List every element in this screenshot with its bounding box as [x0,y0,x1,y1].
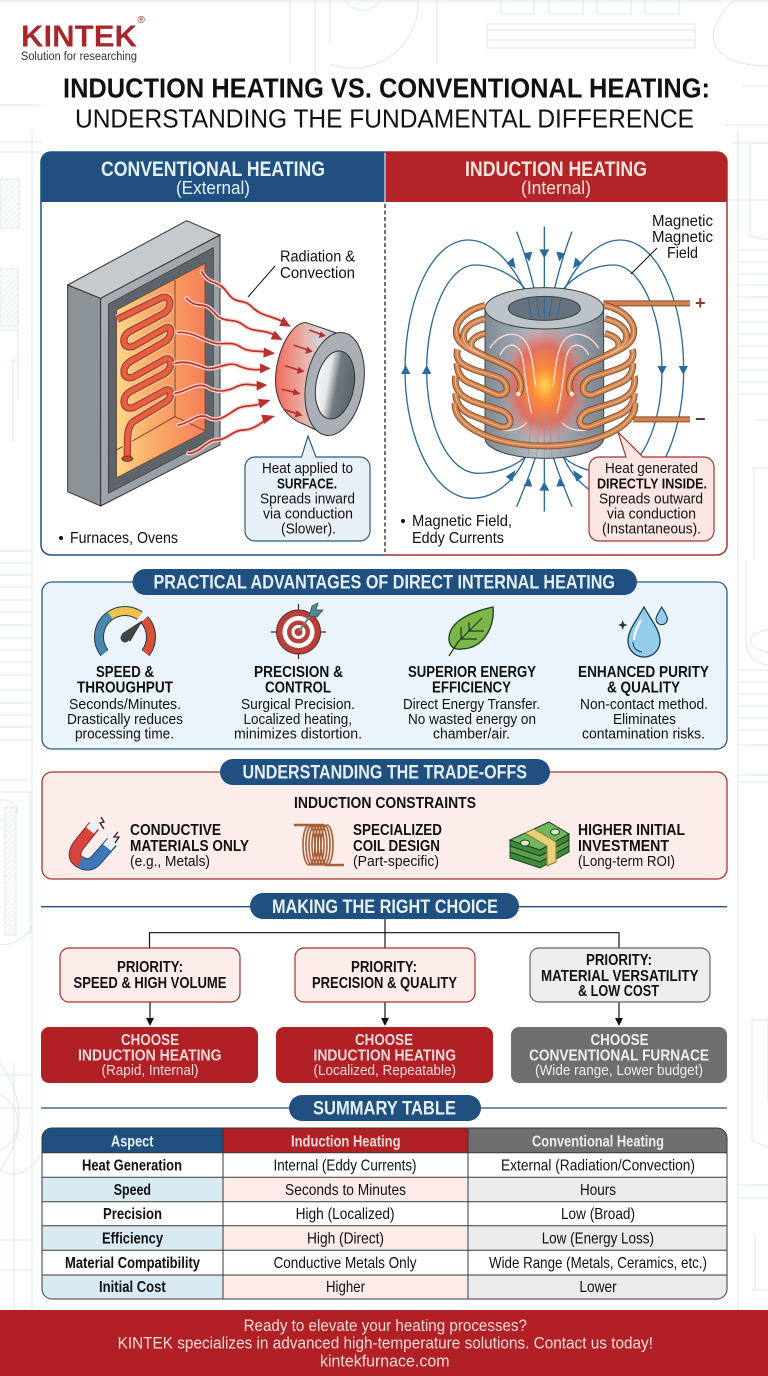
arrowheads [146,1018,623,1026]
header: conventional heating [41,152,384,202]
row: heat generation: Internal (Eddy Currents) [274,1158,416,1174]
text: superior energy efficiency: EFFICIENCY [432,680,511,696]
text: conductive materials only: (e.g., Metals) [130,853,210,870]
text: superior energy efficiency: SUPERIOR ENERGY [408,664,536,681]
text: conductive materials only [130,822,249,870]
row: material compatibility: Material Compatibility [65,1255,200,1272]
text: superior energy efficiency: No wasted energy on [408,711,536,728]
section: making the right choice [41,893,727,1083]
callout: internal heat: (Instantaneous). [602,520,701,538]
row: initial cost [99,1279,617,1296]
copper leads [603,303,690,419]
text: speed and throughput: SPEED & [96,664,154,681]
icon: target [271,603,326,659]
logo: Solution for researching [21,51,137,63]
row: heat generation: External (Radiation/Convection) [501,1158,695,1174]
row: efficiency [102,1230,654,1248]
text: speed and throughput: processing time. [75,726,174,742]
section: summary table [41,1095,727,1299]
row: speed [114,1182,616,1199]
footer banner: KINTEK specializes in advanced high-temperature solutions. Contact us today! [118,1334,653,1352]
result: conventional furnace: (Wide range, Lower budget) [535,1062,703,1079]
callout: surface heat: Heat applied to [262,460,353,477]
callout: internal heat: DIRECTLY INSIDE. [597,476,707,492]
label: radiation and convection: Convection [280,265,355,282]
text: enhanced purity and quality: contamination risks. [582,726,705,742]
text: precision and control: minimizes distortion. [234,726,362,742]
text: higher initial investment: HIGHER INITIAL [578,822,685,839]
result: induction rapid: CHOOSE [121,1032,179,1049]
logo: KINTEK [21,18,138,54]
result: induction rapid [41,1027,258,1083]
priority: precision and quality: PRIORITY: [351,959,417,976]
panel: practical advantages [42,569,727,749]
callout: internal heat: Heat generated [605,460,698,477]
subheading: induction constraints: INDUCTION CONSTRAINTS [294,795,476,812]
text: speed and throughput [67,664,183,742]
result: induction localized [276,1027,493,1083]
polarity: plus and minus [695,293,706,429]
row: material compatibility: Wide Range (Metals, Ceramics, etc.) [489,1255,707,1272]
callout: surface heat: via conduction [263,506,353,522]
polarity: plus and minus: − [695,409,706,429]
panel: trade-offs [42,759,727,879]
text: specialized coil design: (Part-specific) [353,853,439,870]
row: precision: High (Localized) [296,1206,395,1223]
row: speed: Speed [114,1182,151,1199]
text: precision and control: Localized heating, [244,711,352,728]
row: efficiency: High (Direct) [307,1230,384,1248]
priority: speed and high volume: SPEED & HIGH VOLUME [74,975,227,992]
heading: trade-offs: UNDERSTANDING THE TRADE-OFFS [242,762,527,784]
polarity: plus and minus: + [695,293,706,313]
logo [21,15,146,63]
row: initial cost: Initial Cost [99,1279,166,1296]
result: induction localized: CHOOSE [355,1032,413,1049]
result: conventional furnace: CONVENTIONAL FURNACE [529,1048,709,1064]
icon: copper coil [294,825,344,865]
field arrowheads [401,249,688,491]
footer banner: Ready to elevate your heating processes? [244,1316,527,1335]
header: induction heating [386,152,727,202]
priority: material versatility and low cost: PRIORITY: [586,952,652,969]
row: initial cost: Higher [326,1279,366,1296]
label: magnetic field: Field [667,245,698,262]
header: induction heating: (Internal) [521,178,591,198]
row: precision: Precision [103,1206,162,1223]
cylinder [485,308,604,458]
callout: surface heat: SURFACE. [277,476,337,492]
header: induction heating: INDUCTION HEATING [465,158,647,181]
text: specialized coil design: SPECIALIZED [353,822,442,839]
table header row: Induction Heating [291,1134,400,1150]
callout: internal heat: via conduction [607,506,696,522]
label: furnaces, ovens: Furnaces, Ovens [70,530,178,547]
label: magnetic field [631,213,713,274]
header: conventional heating: (External) [176,178,250,198]
row: precision: Low (Broad) [561,1206,635,1223]
label: radiation and convection [248,248,355,297]
text: superior energy efficiency: Direct Energy Transfer. [403,696,540,713]
text: precision and control [234,664,362,742]
text: superior energy efficiency: chamber/air. [433,726,510,742]
result: induction localized: (Localized, Repeatable) [314,1062,456,1079]
row: material compatibility [65,1255,707,1272]
label: magnetic field, eddy currents [401,513,512,547]
heading: summary table: SUMMARY TABLE [313,1098,456,1120]
text: precision and control: Surgical Precision. [241,696,355,713]
eddy currents [490,334,599,430]
table header row [111,1134,664,1150]
priority: precision and quality [295,948,475,1002]
table header row: Conventional Heating [532,1134,664,1150]
result: induction rapid: (Rapid, Internal) [102,1062,198,1079]
label: magnetic field: Magnetic [652,213,713,230]
icon: speedometer [99,611,151,653]
text: conductive materials only: MATERIALS ONLY [130,838,249,855]
text: enhanced purity and quality: Non-contact method. [580,696,708,713]
row: efficiency: Low (Energy Loss) [542,1230,654,1248]
callout: internal heat: Spreads outward [599,490,703,508]
priority: speed and high volume [60,948,240,1002]
callout: internal heat [589,432,714,541]
text: superior energy efficiency [403,664,540,742]
illustration: furnace [68,221,372,506]
title [63,72,710,134]
label: magnetic field, eddy currents: Magnetic Field, [412,513,512,530]
row: heat generation: Heat Generation [82,1158,182,1174]
priority: material versatility and low cost: MATERIAL VERSATILITY [541,968,699,985]
priority: material versatility and low cost: & LOW COST [578,983,659,1000]
row: speed: Seconds to Minutes [285,1182,406,1199]
heading: making the right choice: MAKING THE RIGHT CHOICE [272,896,498,918]
heading: practical advantages: PRACTICAL ADVANTAGES OF DIRECT INTERNAL HEATING [154,572,615,594]
header: conventional heating: CONVENTIONAL HEATING [101,158,325,181]
text: precision and control: PRECISION & [254,664,343,681]
footer banner [0,1310,768,1376]
label: radiation and convection: Radiation & [280,248,355,266]
title: UNDERSTANDING THE FUNDAMENTAL DIFFERENCE [75,104,694,134]
icon: water drops [618,607,667,657]
icon: metal ring [276,323,372,440]
icon: leaf [449,607,493,656]
text: specialized coil design [353,822,442,870]
title: INDUCTION HEATING VS. CONVENTIONAL HEATING: [63,72,710,104]
row: precision [103,1206,635,1223]
row: material compatibility: Conductive Metals Only [274,1255,416,1272]
priority: precision and quality: PRECISION & QUALITY [312,975,457,992]
text: speed and throughput: THROUGHPUT [77,680,173,696]
result: induction rapid: INDUCTION HEATING [78,1048,222,1064]
panel: comparison [41,152,727,555]
text: speed and throughput: Drastically reduces [67,711,183,728]
table header row: Aspect [111,1134,154,1150]
row: efficiency: Efficiency [102,1230,163,1248]
label: magnetic field, eddy currents: Eddy Currents [412,530,504,547]
text: enhanced purity and quality [578,664,709,742]
footer banner: kintekfurnace.com [320,1352,450,1370]
icon: money stack [510,822,569,868]
text: higher initial investment: INVESTMENT [578,838,669,855]
text: higher initial investment [578,822,685,870]
row: speed: Hours [580,1182,616,1199]
result: induction localized: INDUCTION HEATING [314,1048,456,1064]
callout: surface heat: Spreads inward [260,490,355,508]
result: conventional furnace [511,1027,727,1083]
result: conventional furnace: CHOOSE [590,1032,649,1049]
icon: heat waves [175,272,291,453]
text: enhanced purity and quality: Eliminates [613,711,676,728]
copper coil [455,305,635,446]
icon: horseshoe magnet [75,817,119,864]
row: heat generation [82,1158,695,1174]
row: initial cost: Lower [579,1279,617,1296]
text: enhanced purity and quality: ENHANCED PURITY [578,664,709,681]
logo: ® [138,15,146,26]
text: conductive materials only: CONDUCTIVE [130,822,221,839]
priority: material versatility and low cost [530,948,710,1002]
callout: surface heat [245,436,370,541]
text: precision and control: CONTROL [265,680,331,696]
label: magnetic field: Magnetic [652,229,713,246]
magnetic field lines [405,227,684,512]
decision connectors [150,919,619,1020]
priority: speed and high volume: PRIORITY: [117,959,183,976]
text: enhanced purity and quality: & QUALITY [607,680,680,696]
text: speed and throughput: Seconds/Minutes. [69,696,181,713]
text: specialized coil design: COIL DESIGN [353,838,440,855]
illustration: induction coil [401,227,690,512]
callout: surface heat: (Slower). [281,520,336,538]
text: higher initial investment: (Long-term ROI) [578,853,675,870]
table [42,1128,727,1299]
